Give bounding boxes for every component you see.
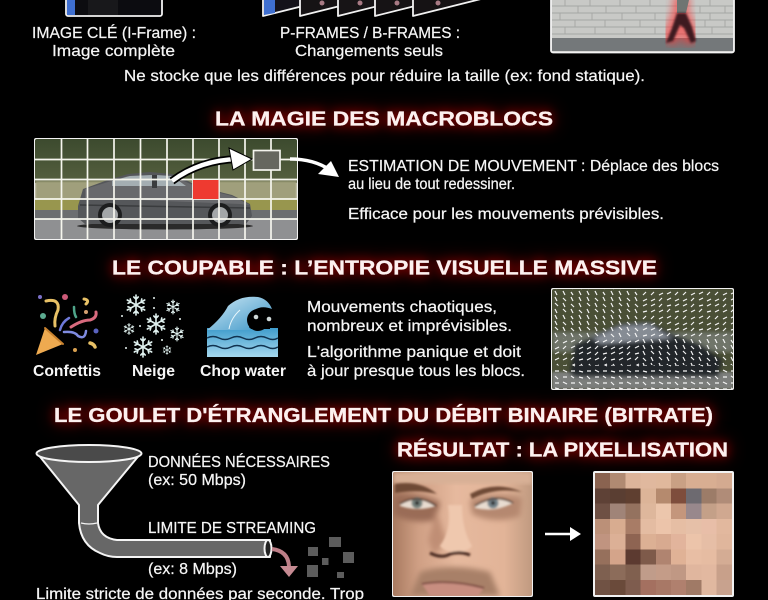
icon: funnel and pipe <box>36 445 272 557</box>
heading: goulet d'étranglement: LE GOULET D'ÉTRANGLEMENT DU DÉBIT BINAIRE (BITRATE) <box>54 404 713 427</box>
text: chaotic motion: L'algorithme panique et doit <box>307 344 522 361</box>
text: icon labels: Confettis <box>33 363 101 380</box>
heading: le coupable: LE COUPABLE : L’ENTROPIE VISUELLE MASSIVE <box>112 258 657 280</box>
heading: résultat: RÉSULTAT : LA PIXELLISATION <box>397 438 728 462</box>
arrow: to explanation <box>290 159 339 177</box>
text: streaming limit: (ex: 8 Mbps) <box>148 561 237 578</box>
arrow: overflow <box>272 549 298 577</box>
text: image clé label <box>32 23 196 60</box>
text: motion estimation: au lieu de tout redessiner. <box>348 176 515 193</box>
text: chaotic motion: nombreux et imprévisibles. <box>307 318 512 335</box>
panel: image clé thumbnail <box>66 0 162 16</box>
text: frames label <box>280 25 460 60</box>
icon: lost data pixels <box>307 537 354 578</box>
heading: la magie des macroblocs: LA MAGIE DES MACROBLOCS <box>215 108 553 130</box>
text: differences note: Ne stocke que les différences pour réduire la taille (ex: fond statique). <box>124 68 645 85</box>
moved block <box>254 150 280 170</box>
panel: pixelated face <box>593 471 734 597</box>
red block <box>193 180 218 199</box>
panel: static wall with moving person <box>551 0 734 52</box>
text: chaotic motion <box>307 299 525 380</box>
panel: macroblock car image <box>34 138 298 240</box>
text: chaotic motion: Mouvements chaotiques, <box>307 299 497 316</box>
text: motion estimation: ESTIMATION DE MOUVEMENT : Déplace des blocs <box>348 158 719 175</box>
text: image clé label: Image complète <box>52 43 175 60</box>
text: frames label: Changements seuls <box>295 43 443 60</box>
icon: P and B frames stack <box>263 0 483 16</box>
icon: wave <box>207 297 278 357</box>
text: frames label: P-FRAMES / B-FRAMES : <box>280 25 460 42</box>
text: icon labels: Neige <box>132 363 175 380</box>
text: streaming limit: LIMITE DE STREAMING <box>148 520 316 537</box>
text: streaming limit <box>148 520 316 578</box>
text: data required: DONNÉES NÉCESSAIRES <box>148 454 330 471</box>
arrow: motion vector <box>172 148 252 181</box>
text: data required: (ex: 50 Mbps) <box>148 472 246 489</box>
text: motion estimation <box>348 158 719 223</box>
text: data required <box>148 454 330 489</box>
text: image clé label: IMAGE CLÉ (I-Frame) : <box>32 23 196 42</box>
text: chaotic motion: à jour presque tous les blocs. <box>307 363 525 380</box>
panel: motion vectors image <box>551 288 734 390</box>
car <box>77 172 253 230</box>
text: icon labels <box>33 363 286 380</box>
arrow: to pixelated <box>545 527 581 541</box>
panel: sharp face <box>392 471 533 597</box>
text: icon labels: Chop water <box>200 363 286 380</box>
icon: confetti <box>36 294 98 355</box>
icon: snow <box>121 295 183 357</box>
text: motion estimation: Efficace pour les mouvements prévisibles. <box>348 206 664 223</box>
